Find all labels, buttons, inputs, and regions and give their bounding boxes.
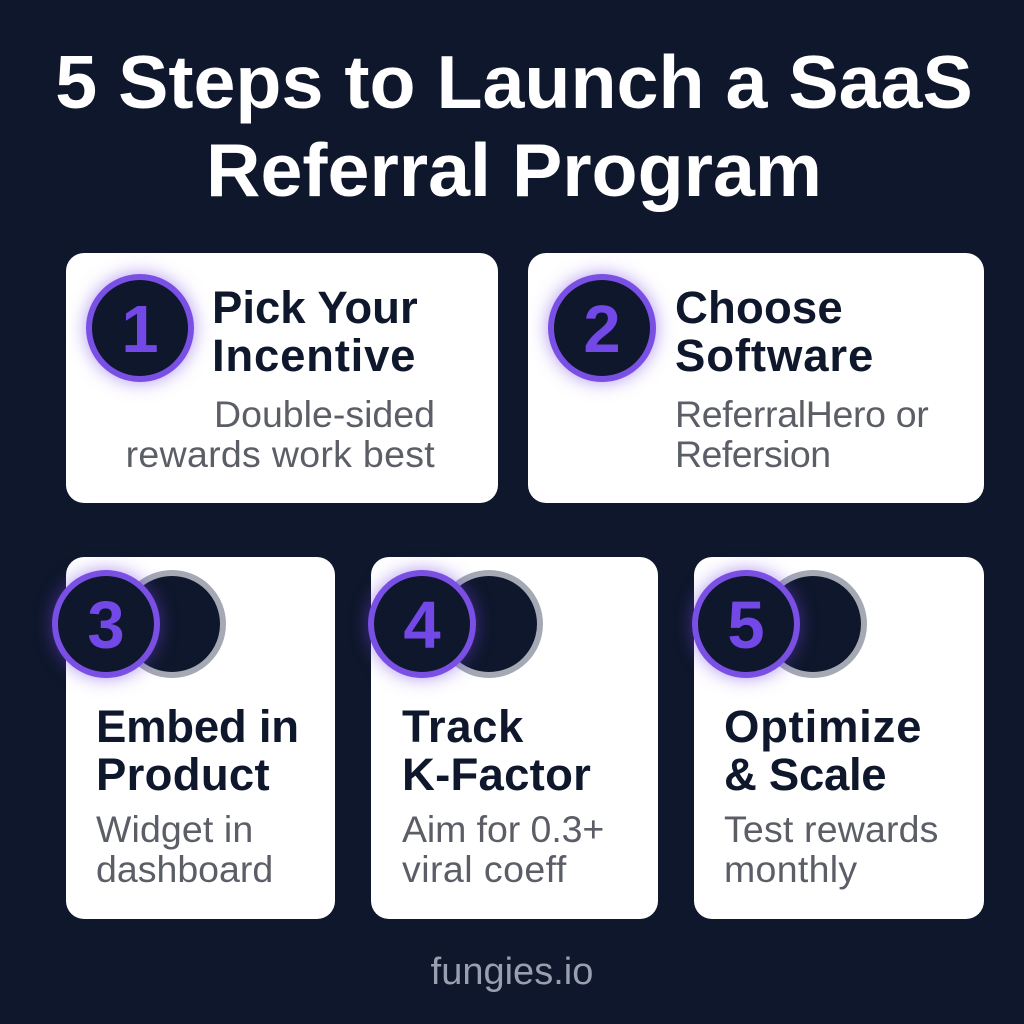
step 5 heading <box>724 701 922 800</box>
step 1 heading <box>212 282 418 381</box>
step 2 heading <box>675 282 874 381</box>
footer brand: fungies.io <box>431 951 593 993</box>
step 4 heading: K-Factor <box>402 749 591 800</box>
step 3 badge <box>52 570 160 678</box>
title: Referral Program <box>206 128 822 212</box>
step 2 badge <box>548 274 656 382</box>
step 4 badge: 4 <box>403 588 441 663</box>
step 5 badge: 5 <box>727 588 765 663</box>
step 3 badge: 3 <box>87 588 125 663</box>
step 2 heading: Software <box>675 330 874 381</box>
panel: step 4 <box>371 557 658 919</box>
title <box>55 40 973 212</box>
step 3 grey circle <box>118 570 226 678</box>
step 3 text: dashboard <box>96 848 273 890</box>
step 1 heading: Pick Your <box>212 282 418 333</box>
step 4 text: Aim for 0.3+ <box>402 808 604 850</box>
step 3 heading <box>96 701 299 800</box>
step 4 grey circle <box>435 570 543 678</box>
step 4 heading <box>402 701 591 800</box>
step 5 text <box>724 808 939 890</box>
step 1 text: Double-sided <box>214 393 435 435</box>
step 4 text <box>402 808 604 890</box>
title: 5 Steps to Launch a SaaS <box>55 40 973 124</box>
step 1 heading: Incentive <box>212 330 416 381</box>
step 1 text <box>126 393 435 475</box>
step 5 heading: Optimize <box>724 701 922 752</box>
step 5 grey circle <box>759 570 867 678</box>
step 1 badge: 1 <box>121 292 159 367</box>
step 2 badge: 2 <box>583 292 621 367</box>
step 4 heading: Track <box>402 701 524 752</box>
panel: step 1 <box>66 253 498 503</box>
step 2 text <box>675 393 928 475</box>
step 5 text: Test rewards <box>724 808 939 850</box>
step 1 badge <box>86 274 194 382</box>
step 4 badge <box>368 570 476 678</box>
step 5 heading: & Scale <box>724 749 886 800</box>
panel: step 3 <box>66 557 335 919</box>
step 2 text: ReferralHero or <box>675 393 928 435</box>
step 5 text: monthly <box>724 848 857 890</box>
step 2 heading: Choose <box>675 282 843 333</box>
step 1 text: rewards work best <box>126 433 435 475</box>
step 5 badge <box>692 570 800 678</box>
step 4 text: viral coeff <box>402 848 567 890</box>
step 3 heading: Product <box>96 749 270 800</box>
step 3 heading: Embed in <box>96 701 299 752</box>
step 3 text: Widget in <box>96 808 253 850</box>
panel: step 5 <box>694 557 984 919</box>
panel: step 2 <box>528 253 984 503</box>
step 2 text: Refersion <box>675 433 831 475</box>
step 3 text <box>96 808 273 890</box>
